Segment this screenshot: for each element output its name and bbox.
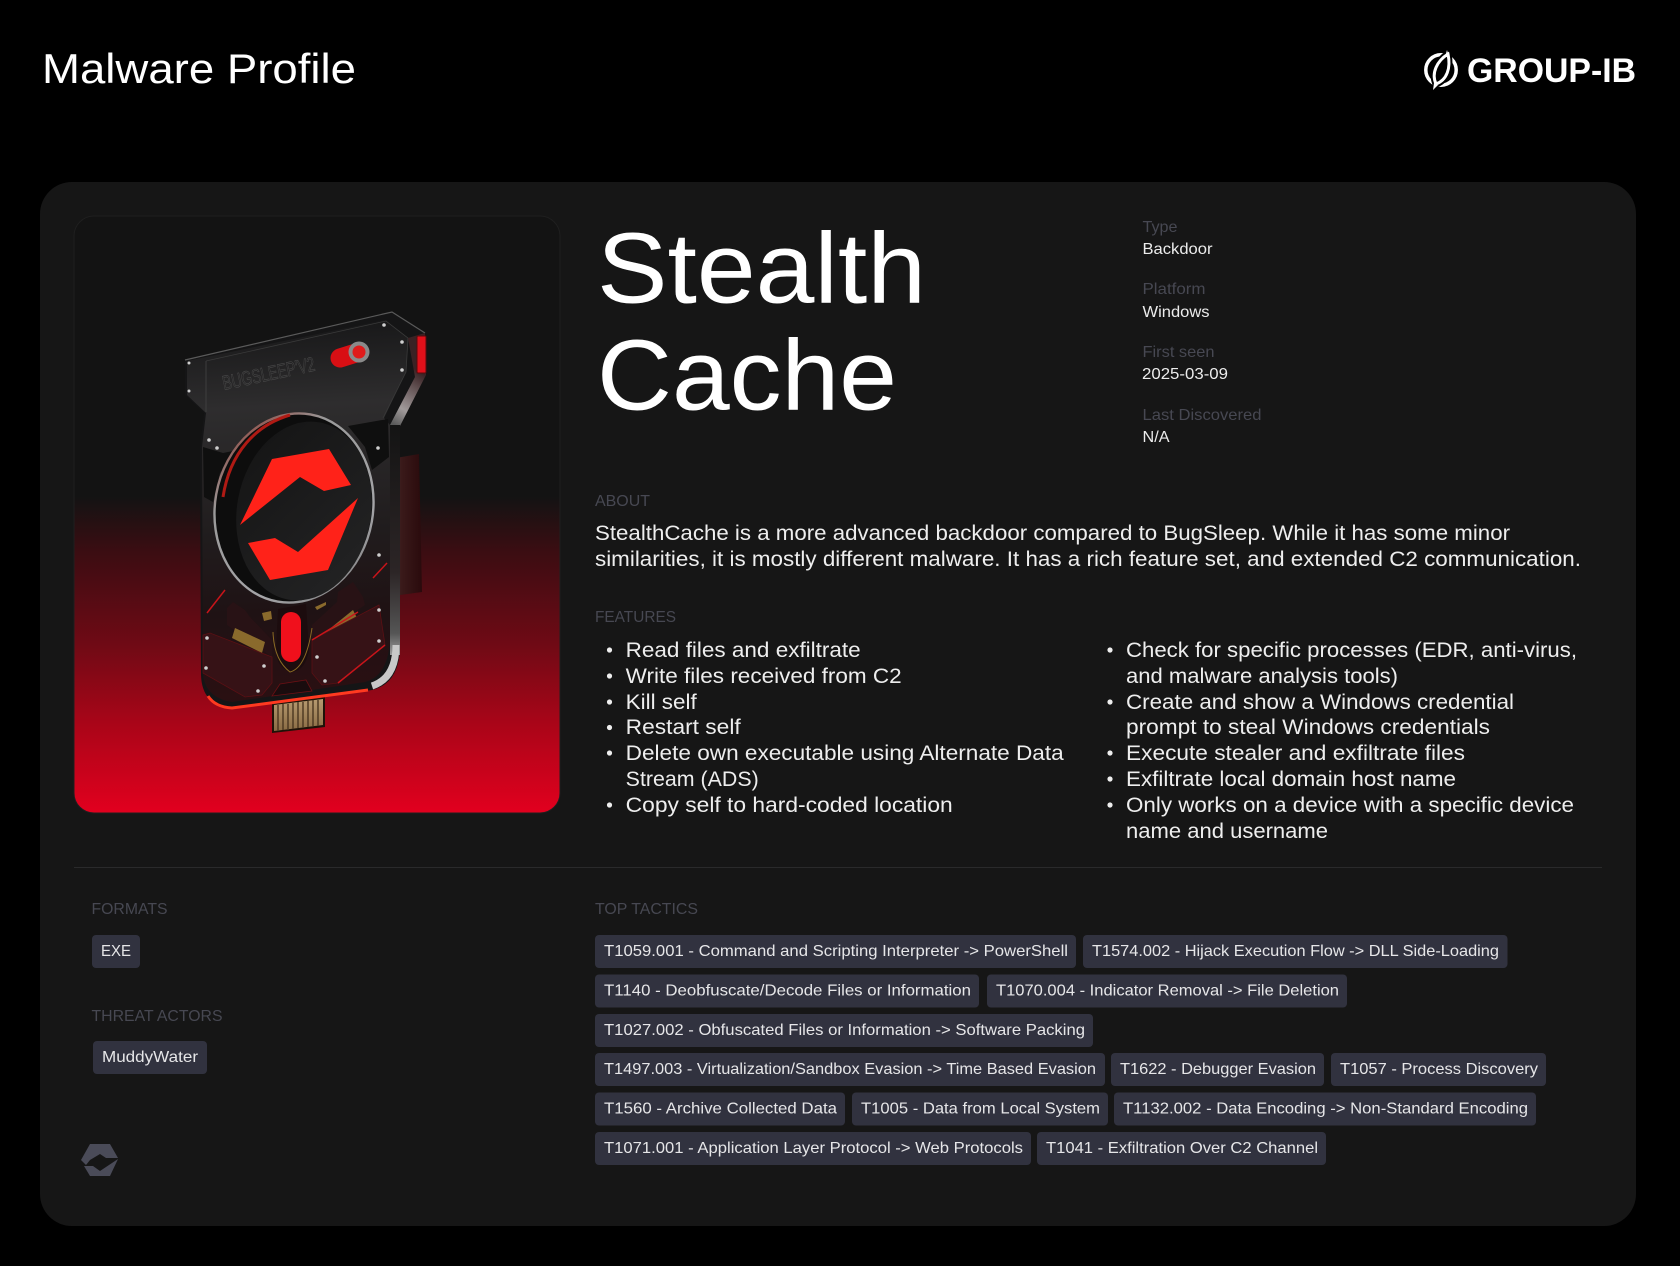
features: right column: Create and show a Windows credential xyxy=(1126,691,1514,714)
red under-glow xyxy=(208,690,368,708)
features: left column: Stream (ADS) xyxy=(626,768,759,791)
features: right column: and malware analysis tools) xyxy=(1126,665,1398,688)
section: top tactics: TOP TACTICS xyxy=(595,901,698,918)
features: right column: Exfiltrate local domain host name xyxy=(1126,768,1456,791)
heading: malware name xyxy=(597,212,926,432)
right bevel xyxy=(390,333,426,426)
tag: EXE: EXE xyxy=(101,943,131,960)
metadata list: Windows xyxy=(1142,304,1210,321)
page title: Malware Profile xyxy=(42,45,356,92)
panel: main card xyxy=(40,182,1636,1226)
gold edge connector xyxy=(272,697,325,733)
icon: small hexagon logo xyxy=(81,1144,118,1176)
lower plates xyxy=(203,605,385,697)
tactic tags: T1027.002 - Obfuscated Files or Information -> Software Packing xyxy=(604,1022,1085,1039)
icon: Group-IB emblem xyxy=(1426,50,1456,90)
device body outline xyxy=(185,312,426,708)
features: left column: Kill self xyxy=(626,691,697,714)
section: threat actors xyxy=(92,1008,222,1074)
section: features xyxy=(595,609,1577,843)
metadata list: N/A xyxy=(1142,429,1170,446)
panel: malware artwork xyxy=(74,216,560,813)
section: formats xyxy=(92,901,168,968)
features: right column: Check for specific processes (EDR, anti-virus, xyxy=(1126,639,1577,662)
section: about: StealthCache is a more advanced backdoor compared to BugSleep. While it has some minor xyxy=(595,522,1510,545)
tactic tags: T1574.002 - Hijack Execution Flow -> DLL Side-Loading xyxy=(1092,943,1499,960)
metadata list: Last Discovered xyxy=(1142,407,1262,424)
tactic tags: T1071.001 - Application Layer Protocol -> Web Protocols xyxy=(604,1140,1023,1157)
features: right column xyxy=(1107,639,1577,843)
tactic tags: T1560 - Archive Collected Data xyxy=(604,1100,837,1118)
metadata list: 2025-03-09 xyxy=(1142,366,1228,383)
section: about: similarities, it is mostly different malware. It has a rich feature set, and extended C2 communication. xyxy=(595,548,1581,571)
metadata list: Backdoor xyxy=(1142,241,1213,258)
section: formats: FORMATS xyxy=(92,901,168,918)
printed device name: BUGSLEEP'V2 xyxy=(220,354,317,395)
features: left column: Copy self to hard-coded location xyxy=(626,794,953,817)
tactic tags: T1005 - Data from Local System xyxy=(861,1100,1100,1118)
tactic tags: T1057 - Process Discovery xyxy=(1340,1061,1538,1078)
features: right column: name and username xyxy=(1126,820,1328,843)
section: about: ABOUT xyxy=(595,493,650,510)
frame brackets xyxy=(203,419,389,502)
section: features: FEATURES xyxy=(595,609,676,626)
section: threat actors: THREAT ACTORS xyxy=(92,1008,222,1025)
features: left column: Write files received from C2 xyxy=(626,665,902,688)
tactic tags: T1622 - Debugger Evasion xyxy=(1120,1061,1316,1078)
upper lower-section blocks xyxy=(227,582,365,657)
features: left column: Read files and exfiltrate xyxy=(626,639,861,662)
top edge highlight xyxy=(185,312,425,360)
screws xyxy=(188,323,404,693)
features: right column: Execute stealer and exfiltrate files xyxy=(1126,742,1465,765)
device body face xyxy=(187,320,408,702)
display screen xyxy=(222,411,386,611)
metadata list: First seen xyxy=(1142,344,1214,361)
heading: malware name: Cache xyxy=(597,320,897,432)
illustration: BugSleep v2 device xyxy=(185,312,426,733)
red side light xyxy=(417,336,426,373)
connector tab on right xyxy=(390,454,422,595)
features: left column xyxy=(607,639,1064,817)
red accent lines xyxy=(207,563,387,683)
bottom notch details xyxy=(272,680,312,696)
tactic tags: T1132.002 - Data Encoding -> Non-Standard Encoding xyxy=(1123,1100,1528,1118)
tactic tags: T1140 - Deobfuscate/Decode Files or Information xyxy=(604,982,971,1000)
tactic tags xyxy=(595,935,1546,1165)
red indicator pill xyxy=(273,604,312,672)
logo: Group-IB: GROUP-IB xyxy=(1467,52,1636,90)
ribbon cables xyxy=(232,602,357,653)
features: right column: prompt to steal Windows credentials xyxy=(1126,716,1490,739)
tactic tags: T1070.004 - Indicator Removal -> File Deletion xyxy=(996,982,1339,1000)
section: top tactics xyxy=(595,901,1546,1165)
features: left column: Restart self xyxy=(626,716,741,739)
metadata list xyxy=(1142,219,1262,446)
heading: malware name: Stealth xyxy=(597,212,926,324)
metadata list: Platform xyxy=(1142,281,1206,298)
display ring red glint xyxy=(223,415,290,497)
metadata list: Type xyxy=(1142,219,1178,236)
tag: MuddyWater: MuddyWater xyxy=(102,1049,199,1066)
tactic tags: T1497.003 - Virtualization/Sandbox Evasion -> Time Based Evasion xyxy=(604,1061,1096,1078)
bottom-right silver corner xyxy=(372,645,396,686)
status switch xyxy=(340,342,370,362)
display ring xyxy=(200,401,388,615)
features: left column: Delete own executable using Alternate Data xyxy=(626,742,1064,765)
features: right column: Only works on a device with a specific device xyxy=(1126,794,1574,817)
tactic tags: T1041 - Exfiltration Over C2 Channel xyxy=(1046,1140,1318,1157)
section: about xyxy=(595,493,1581,571)
tactic tags: T1059.001 - Command and Scripting Interpreter -> PowerShell xyxy=(604,943,1068,960)
red logo xyxy=(240,449,358,580)
